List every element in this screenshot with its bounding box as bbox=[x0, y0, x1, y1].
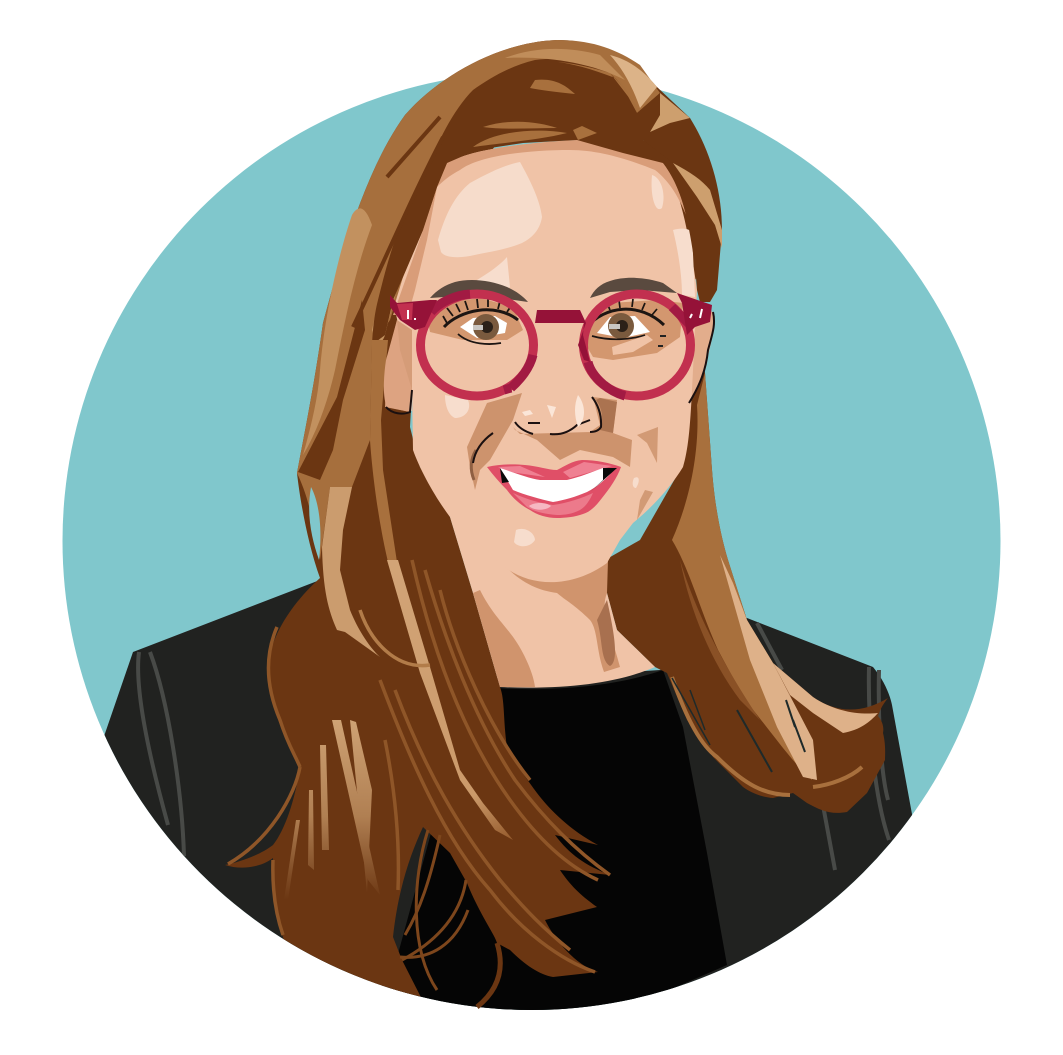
neck bbox=[450, 517, 655, 688]
cheek and nose shadows bbox=[467, 393, 632, 490]
eye socket shadows bbox=[427, 298, 523, 340]
long light strand bbox=[387, 560, 513, 840]
loose hair strands at bottom bbox=[400, 830, 500, 1007]
nose lines and highlights bbox=[473, 397, 601, 463]
ear bbox=[384, 320, 412, 412]
side of face and ear shading bbox=[385, 320, 412, 412]
teal background circle bbox=[62, 72, 1000, 1010]
lower hair strands bbox=[228, 560, 610, 972]
teal gap by hair strand bbox=[309, 487, 320, 560]
forehead highlights bbox=[438, 162, 542, 257]
hair right highlights bbox=[650, 93, 722, 248]
ear outline bbox=[386, 312, 714, 414]
eyes bbox=[443, 299, 666, 347]
black jacket bbox=[100, 580, 914, 1030]
main hair mass bbox=[225, 40, 722, 1015]
centre hair band bbox=[370, 340, 397, 562]
hair highlight fan bbox=[284, 720, 380, 900]
black top bbox=[380, 670, 727, 1020]
upper left hair band bbox=[297, 40, 660, 560]
dark wedge in left hair bbox=[298, 300, 365, 480]
lower right hair bbox=[605, 290, 888, 813]
hair lighter streaks bbox=[303, 165, 440, 455]
lips and smile bbox=[487, 460, 621, 518]
face bbox=[385, 140, 697, 582]
hairline shadow bbox=[393, 140, 686, 315]
red glasses bbox=[390, 293, 712, 396]
eyebrows bbox=[430, 278, 677, 302]
hair top streaks bbox=[473, 62, 657, 147]
light hair streak bbox=[322, 487, 380, 657]
hair dark top mass bbox=[372, 59, 722, 345]
right ear bbox=[688, 305, 714, 405]
